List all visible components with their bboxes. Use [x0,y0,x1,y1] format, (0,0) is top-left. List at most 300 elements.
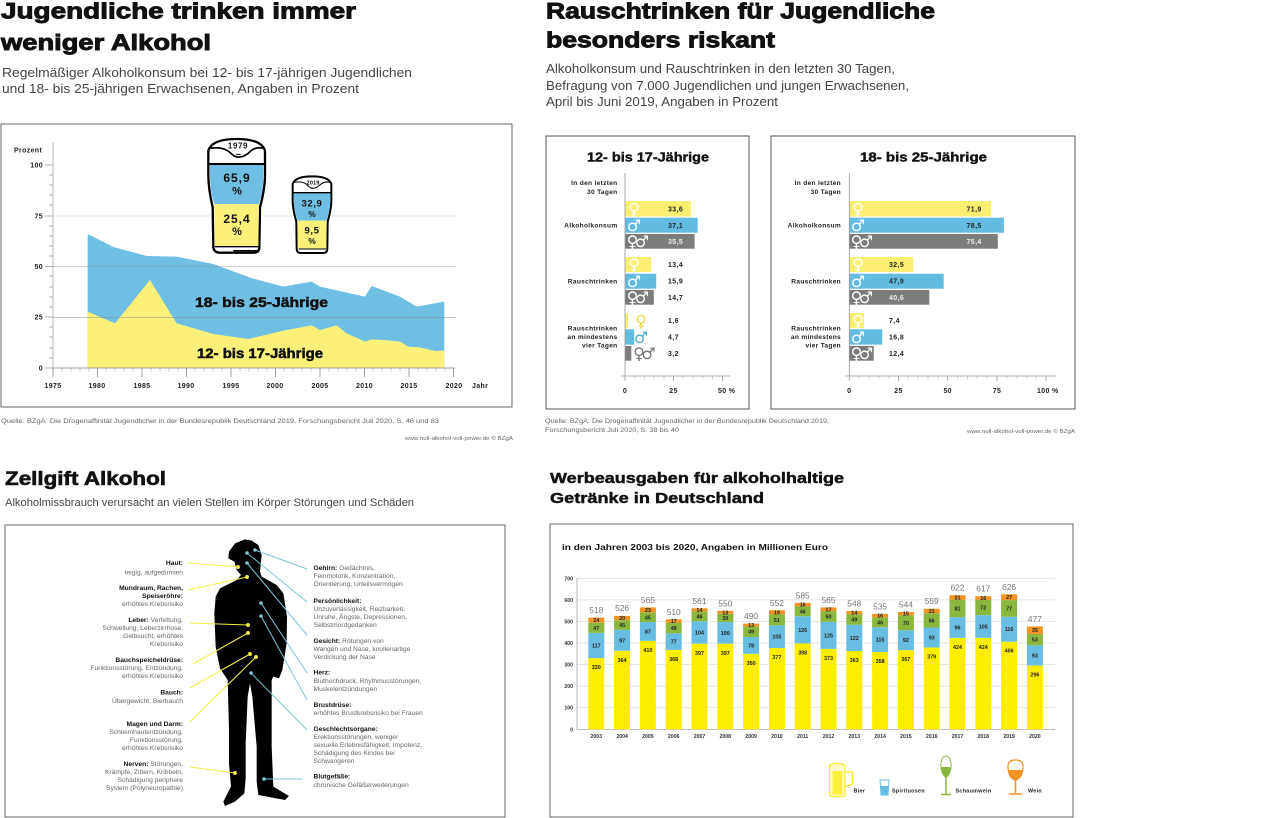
title: Werbeausgaben [550,470,844,507]
row labels [564,180,618,350]
y axis labels and ticks: 75 [34,214,43,220]
right column labels: Herz: [314,670,330,676]
values: 15,9 [668,279,683,286]
bar segment values: 15 [903,612,909,618]
bar segment values: 364 [618,658,627,664]
gender icons: ♂ [851,272,865,291]
values: 35,5 [668,239,683,246]
panel: 18- bis 25-Jährige bar chart [771,136,1075,409]
bar totals: 510 [667,607,681,617]
bar segment values: 45 [619,623,625,629]
x axis: 75 [993,388,1001,395]
icon: large beer glass 1979: % [232,226,242,238]
gender icons [851,200,873,363]
bar segment values: 35 [1032,628,1038,634]
x axis labels and ticks: 1980 [89,383,105,390]
year labels: 2009 [745,734,757,740]
year labels: 2008 [720,734,731,740]
right column labels: Orientierung, Urteilsvermögen [314,581,403,588]
year labels: 2013 [849,734,860,740]
bar segment values: 81 [954,606,960,612]
gender icons: ♀ [851,288,862,307]
bar segment values: 49 [748,630,754,636]
bar totals: 622 [951,582,965,592]
bar segment values: 100 [721,631,730,637]
icon: human silhouette [214,539,289,806]
x axis: 50 [943,388,952,395]
left column labels: erhöhtes Krebsrisiko [122,601,183,608]
bar segment values: 105 [772,635,781,641]
panel: advertising spending chart [550,524,1073,817]
x axis labels and ticks [45,368,488,390]
icon: large beer glass 1979: % [232,186,242,198]
subtitle: left top [2,66,412,96]
bar totals: 626 [1002,582,1016,592]
bar segment values: 398 [798,650,807,656]
bar segment values: 92 [903,638,909,644]
values: 32,5 [889,262,904,269]
bar totals: 565 [641,595,655,605]
values: 75,4 [966,239,982,246]
right column labels: Schädigung des Kindes bei [314,750,395,757]
row labels [788,180,841,350]
right column labels: Gehirn: Gedächtnis, [314,565,375,572]
y axis and gridlines: 500 [564,619,573,625]
right column labels: erhöhtes Brustkrebsrisiko bei Frauen [314,710,423,717]
bar segment values: 373 [824,656,833,662]
bar segment values: 21 [954,595,960,601]
subtitle: right top: April bis Juni 2019, Angaben in Prozent [546,95,779,109]
left column labels: Magen und Darm: [127,721,183,728]
bar segment values: 23 [645,608,651,614]
x axis: 50 % [718,388,736,395]
bar segment values: 358 [876,659,885,665]
chart subtitle: in den Jahren 2003 bis 2020, Angaben in Millionen Euro [562,543,828,552]
gender icons: ♀ [852,255,864,274]
bar segment values: 17 [671,619,677,625]
x axis: 0 [847,388,851,395]
x axis [845,173,1059,395]
row labels: 30 Tagen [587,189,618,196]
source: bar charts: Forschungsbericht Juli 2020, S. 38 bis 40 [545,427,679,434]
right column labels: Unzuverlässigkeit, Reizbarkeit, [314,606,405,613]
bar totals: 544 [899,600,913,610]
bar segment values: 14 [696,608,702,614]
bar segment values: 397 [695,651,704,657]
row labels: vier Tagen [806,342,841,350]
bar segment values: 330 [592,665,601,671]
source: bar charts [545,418,829,434]
x axis: 0 [623,388,627,395]
bar segment values: 16 [980,596,986,602]
icon: small beer glass 2019: % [308,236,316,246]
values: 1,6 [668,318,679,325]
y axis labels and ticks [14,142,53,372]
subtitle: right top: Befragung von 7.000 Jugendlichen und jungen Erwachsenen, [546,79,909,93]
icon: large beer glass 1979: 25,4 [223,212,251,226]
values: 14,7 [668,295,683,302]
x axis labels and ticks: 2010 [356,383,373,390]
bar segment values: 19 [774,610,780,616]
bar totals: 548 [847,598,862,608]
bar segment values: 13 [722,610,728,616]
left column labels: Bauch: [160,690,183,696]
bar segment values: 397 [721,651,730,657]
bar totals: 518 [589,605,604,615]
left column labels: Schleimhautentzündung, [109,729,183,736]
bar segment values: 296 [1030,672,1039,678]
right column labels: Bluthochdruck, Rhythmusstörungen, [314,678,421,685]
bar segment values: 406 [1005,648,1014,654]
icon: small beer glass 2019 [293,176,331,253]
row labels: Alkoholkonsum [564,222,618,230]
bar segment values: 105 [979,624,988,630]
bar segment values: 46 [800,609,806,615]
row labels: In den letzten [795,180,841,187]
bar segment values: 116 [1005,627,1013,633]
values: 13,4 [668,262,683,269]
bar segment values: 50 [826,614,832,620]
row labels: Alkoholkonsum [788,222,841,230]
icon: large beer glass 1979: 65,9 [223,171,251,185]
bar segment values: 39 [722,616,728,622]
right column labels: sexuelle Erlebnisfähigkeit, Impotenz, [314,742,422,749]
legend: Wein: Wein [1028,788,1042,794]
gender icons: ♂ [635,232,649,251]
y axis and gridlines: 600 [564,598,573,604]
icon: large beer glass 1979 [208,139,265,253]
year labels: 2020 [1029,734,1041,740]
bar segment values: 93 [929,636,935,642]
bar segment values: 47 [593,626,599,632]
legend: Spirituosen [880,780,925,795]
yellow leader lines [188,563,257,774]
year labels: 2017 [952,734,963,740]
title: Jugendliche trinken immer weniger Alkohol: weniger Alkohol [0,30,211,55]
bar segment values: 350 [747,661,756,667]
legend: Bier [830,764,866,796]
panel: body diagram [5,525,505,817]
left column labels: Übergewicht, Bierbauch [112,697,183,705]
y axis labels and ticks: Prozent [14,148,42,154]
bar totals: 535 [873,602,887,612]
left column labels: Mundraum, Rachen, [119,585,183,592]
gender icons: ♂ [627,272,641,291]
credit: bar charts: www.null-alkohol-voll-power.de © BZgA [966,428,1075,435]
panel heading: 12- bis 17-Jährige [587,150,709,164]
values: 78,5 [966,223,982,230]
gender icons: ♀ [851,344,862,363]
x axis labels and ticks: 1990 [178,383,194,390]
year labels: 2011 [797,734,808,740]
row labels: Rauschtrinken [568,326,618,332]
gender icons: ♂ [627,216,641,235]
icon: small beer glass 2019: 32,9 [302,198,322,210]
bar totals: 585 [796,590,810,600]
bar segment values: 24 [593,618,599,624]
legend: Wein [1008,760,1042,794]
gender icons: ♂ [634,328,648,347]
source: bar charts: Quelle: BZgA: Die Drogenaffinität Jugendlicher in der Bundesrepublik Deutschland 2019, [545,418,829,425]
gender icons: ♀ [633,344,645,363]
bar segment values: 27 [1006,595,1012,601]
panel: 12- bis 17-Jährige bar chart [546,136,749,409]
stacked bars [588,594,1043,729]
x axis labels and ticks: 2015 [401,383,417,390]
bar totals: 477 [1028,614,1042,624]
bar segment values: 377 [772,655,781,661]
right column labels: chronische Gefäßerweiterungen [314,782,409,789]
icon: small beer glass 2019: 2019 [307,180,320,186]
legend: Spirituosen: Spirituosen [892,788,925,794]
bar segment values: 117 [592,644,601,650]
y axis and gridlines [564,576,1055,733]
right column labels: Verdickung der Nase [314,654,376,661]
bar segment values: 410 [643,648,652,654]
title: Rauschtrinken für Jugendliche besonders riskant: besonders riskant [546,28,776,53]
gender icons: ♀ [627,288,638,307]
bar segment values: 125 [824,633,833,639]
values [889,206,982,358]
year labels: 2019 [1003,734,1015,740]
right column labels: Gesicht: Rötungen von [314,638,384,645]
row labels: an mindestens [567,334,618,341]
x axis: 25 [669,388,678,395]
gender icons: ♀ [851,232,862,251]
gender icons: ♂ [859,232,873,251]
legend: Schaumwein: Schaumwein [956,788,991,794]
bar segment values: 424 [953,645,962,651]
bar segment values: 70 [903,621,909,627]
legend: Schaumwein [941,756,991,794]
y axis and gridlines: 700 [564,576,573,582]
bar segment values: 72 [980,606,986,612]
subtitle: right top [546,62,909,109]
gender icons: ♀ [627,232,638,251]
gender icons: ♂ [859,288,873,307]
values [668,206,683,358]
subtitle: left top: Regelmäßiger Alkoholkonsum bei 12- bis 17-jährigen Jugendlichen [2,66,412,80]
gender icons: ♂ [635,288,649,307]
bar segment values: 96 [954,625,960,631]
bar segment values: 379 [927,654,936,660]
bar totals: 617 [976,584,991,594]
gender icons: ♀ [852,200,864,218]
bar segment values: 104 [695,630,704,636]
values: 16,8 [889,334,904,342]
right column labels: Feinmotorik, Konzentration, [314,573,395,580]
right column labels [314,565,423,789]
gender icons: ♂ [851,328,865,347]
x axis labels and ticks: Jahr [472,383,488,390]
bar segment values: 49 [851,617,857,623]
area label: 18- bis 25-Jährige: 18- bis 25-Jährige [195,295,329,310]
gender icons [627,200,656,363]
bar totals: 561 [693,596,707,606]
y axis labels and ticks: 25 [34,314,43,322]
area: 12- bis 17-Jährige [88,280,444,368]
right column labels: Muskelentzündungen [314,686,377,693]
bar totals: 565 [822,595,836,605]
bar segment values: 21 [929,609,935,615]
bar totals: 526 [615,603,629,613]
legend: Bier: Bier [854,788,866,794]
title: Rauschtrinken für Jugendliche besonders riskant [546,0,935,53]
bar segment values [592,595,1039,678]
left column labels: erhöhtes Krebsrisiko [122,745,183,752]
bar segment values: 14 [851,611,857,617]
values: 37,1 [668,223,683,230]
right column labels: Geschlechtsorgane: [314,726,378,733]
gender icons: ♂ [641,344,656,363]
title: Zellgift Alkohol: Zellgift Alkohol [5,469,166,490]
x axis labels and ticks: 2000 [267,383,283,390]
x axis labels and ticks: 1995 [223,383,239,390]
area: 18- bis 25-Jährige [88,234,444,368]
left column labels: Gelbsucht, erhöhtes [123,633,184,640]
bar segment values: 13 [748,623,754,629]
icon: large beer glass 1979: 1979 [228,142,248,150]
year labels: 2018 [978,734,989,740]
right column labels: Blutgefäße: [314,774,350,780]
bars [849,201,1004,361]
right column labels: Schwangeren [314,758,355,765]
icon: small beer glass 2019: 9,5 [304,226,320,236]
icon: small beer glass 2019: % [308,209,316,219]
right column labels: Selbstmordgedanken [314,622,377,629]
left column labels: Nerven: Störungen, [124,761,183,768]
bar segment values: 122 [850,636,859,642]
bar segment values: 363 [850,658,859,664]
bar segment values: 77 [671,640,677,646]
bar totals [589,582,1042,624]
right column labels: Unruhe, Ängste, Depressionen, [314,613,407,621]
bar segment values: 16 [877,614,883,620]
title: Jugendliche trinken immer weniger Alkohol [0,0,356,55]
left column labels: Leber: Verfettung, [128,617,183,624]
x axis labels and ticks: 1985 [134,383,150,390]
gender icons: ♂ [851,216,865,235]
source: area chart: Quelle: BZgA: Die Drogenaffinität Jugendlicher in der Bundesrepublik Deutschland 2019, Forschungsbericht Juli 2020, S. 46 und 83 [1,418,439,425]
left column labels: erhöhtes Krebsrisiko [122,673,183,680]
blue leader lines [246,549,307,780]
right column labels: Brustdrüse: [314,702,351,709]
left column labels: Schädigung periphere [118,777,183,784]
left column labels: teigig, aufgedunsen [125,570,183,576]
year labels: 2006 [668,734,680,740]
x axis: 100 % [1037,388,1059,395]
left column labels: Bauchspeicheldrüse: [115,657,183,664]
left column labels: System (Polyneuropathie) [106,785,183,792]
bar segment values: 16 [800,603,806,609]
values: 71,9 [966,206,982,214]
year labels [591,734,1041,740]
row labels: Rauschtrinken [791,278,841,286]
row labels: 30 Tagen [810,189,841,196]
title: Werbeausgaben: Werbeausgaben für alkoholhaltige [550,470,844,487]
row labels: Rauschtrinken [791,326,841,332]
year labels: 2014 [874,734,886,740]
gender icons: ♀ [852,312,864,330]
bar totals: 490 [744,611,758,621]
subtitle: Zellgift: Alkoholmissbrauch verursacht an vielen Stellen im Körper Störungen und Schäden [5,497,414,509]
bar segment values: 97 [619,638,625,644]
subtitle: right top: Alkoholkonsum und Rauschtrinken in den letzten 30 Tagen, [546,62,895,76]
bar segment values: 77 [1006,606,1012,612]
left column labels: Schwellung, Leberzirrhose, [102,625,183,632]
bar segment values: 126 [798,628,807,634]
bar segment values: 51 [774,618,780,624]
bar segment values: 115 [876,638,884,644]
bar segment values: 53 [1032,638,1038,644]
x axis: 25 [894,388,903,395]
year labels: 2015 [900,734,912,740]
left column labels [90,560,184,792]
x axis labels and ticks: 1975 [45,383,61,390]
bar totals: 552 [770,598,784,608]
row labels: Rauschtrinken [568,278,618,286]
right column labels: Persönlichkeit: [314,598,361,605]
row labels: an mindestens [791,334,841,341]
bar totals: 550 [718,598,733,608]
title: Werbeausgaben: Getränke in Deutschland [550,490,764,507]
panel: area chart trend [1,124,512,407]
year labels: 2003 [591,734,602,740]
bar segment values: 20 [619,616,625,622]
y axis labels and ticks: 0 [39,366,43,372]
panel heading: 18- bis 25-Jährige [860,150,987,164]
year labels: 2005 [642,734,654,740]
bars [625,201,698,361]
y axis and gridlines: 200 [564,684,573,690]
left column labels: Funktionsstörung, [130,737,183,744]
year labels: 2010 [771,734,783,740]
bar segment values: 46 [877,620,883,626]
y axis and gridlines: 300 [564,663,573,669]
values: 47,9 [889,279,904,286]
x axis labels and ticks: 2020 [446,383,462,390]
bar segment values: 48 [671,626,677,632]
values: 3,2 [668,351,679,358]
year labels: 2004 [616,734,628,740]
left column labels: Krämpfe, Zittern, Kribbeln, [105,769,183,776]
bar segment values: 46 [696,614,702,620]
year labels: 2012 [823,734,834,740]
left column labels: Speiseröhre: [142,593,183,600]
bar segment values: 93 [1032,654,1038,660]
gender icons: ♀ [635,312,647,330]
gender icons: ♀ [628,200,640,218]
y axis and gridlines: 0 [570,727,573,733]
y axis labels and ticks: 100 [30,162,43,170]
y axis labels and ticks: 50 [34,264,43,271]
bar totals: 559 [925,596,939,606]
y axis and gridlines: 100 [564,706,573,712]
bar segment values: 17 [826,607,832,613]
x axis [621,173,736,395]
left column labels: Funktionsstörung, Entzündung, [90,665,183,672]
row labels: In den letzten [571,180,618,187]
subtitle: left top: und 18- bis 25-jährigen Erwachsenen, Angaben in Prozent [2,82,360,96]
right column labels: Erektionsstörungen, weniger [314,734,399,741]
area label: 12- bis 17-Jährige: 12- bis 17-Jährige [197,346,324,361]
x axis labels and ticks: 2005 [312,383,328,390]
values: 7,4 [889,318,900,325]
bar segment values: 45 [645,615,651,621]
values: 33,6 [668,206,683,214]
bar segment values: 87 [645,630,651,636]
gender icons: ♂ [859,344,873,363]
